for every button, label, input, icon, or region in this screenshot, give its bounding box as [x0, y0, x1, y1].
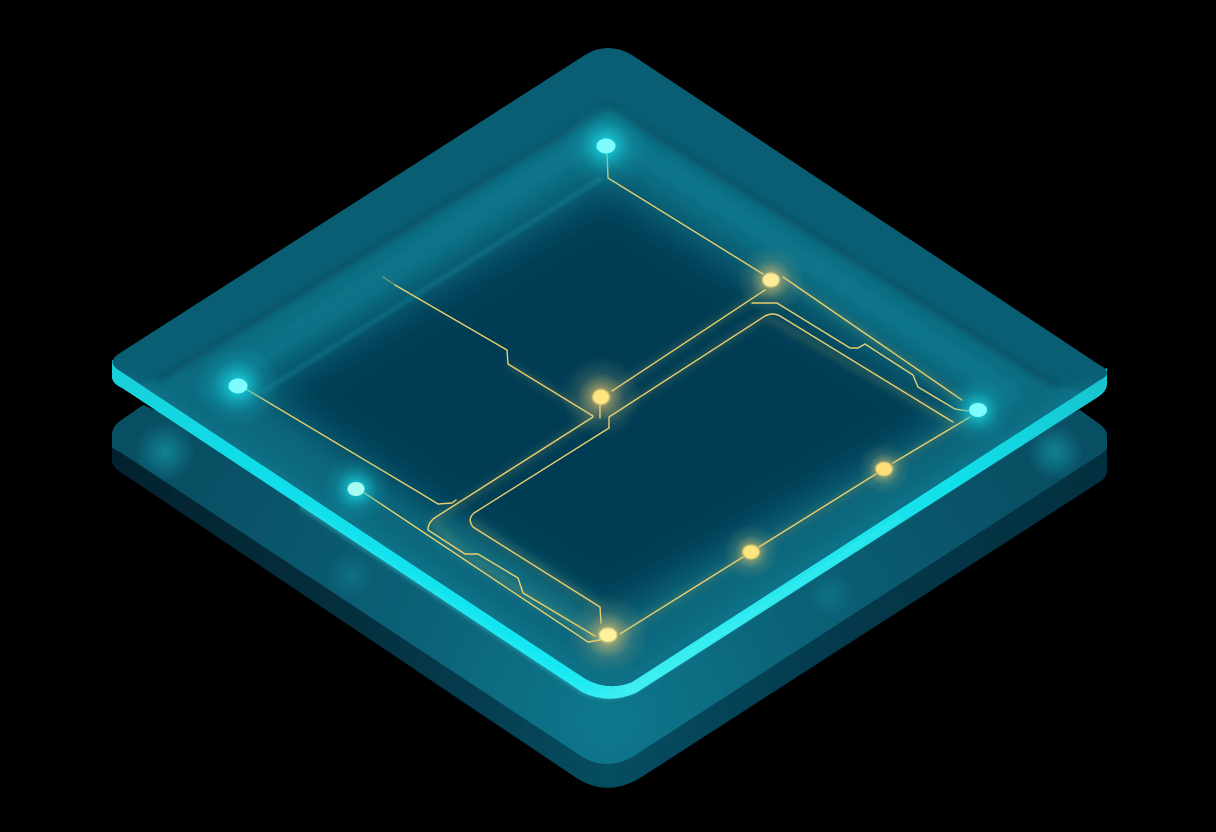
- node: lower right two: [723, 524, 779, 580]
- trace: inner frame upper right: [609, 314, 953, 428]
- soft trace glow: lower left: [440, 525, 590, 620]
- lower plate: [112, 405, 1107, 788]
- node: centre: [561, 357, 641, 437]
- plate face: [112, 48, 1107, 686]
- trace: faded start: [383, 277, 395, 285]
- faint ridge: [262, 178, 602, 392]
- trace: upper right node to right node: [783, 277, 962, 400]
- node: mid left: [322, 455, 390, 523]
- yellow nodes: [561, 246, 910, 675]
- inner panel: [262, 186, 960, 618]
- lower plate face: [112, 405, 1107, 764]
- node: upper right: [737, 246, 805, 314]
- trace: mid left node to bottom: [363, 492, 600, 642]
- trace: centre stem: [599, 403, 601, 418]
- glowing rim: [112, 360, 1107, 699]
- trace: inner bus: [470, 428, 609, 623]
- frame band: [140, 112, 1083, 686]
- lower plate glows: [135, 422, 1083, 619]
- upper plate: [90, 48, 1130, 720]
- trace: left node to bus: [246, 389, 456, 504]
- node: bottom: [568, 595, 648, 675]
- node: top: [564, 104, 648, 188]
- circuit traces: [246, 150, 970, 642]
- node: left: [196, 344, 280, 428]
- trace: upper left to centre: [395, 285, 593, 416]
- node: lower right one: [858, 443, 910, 495]
- trace: top node to upper right node: [607, 150, 763, 274]
- trace: centre to upper right node: [612, 290, 765, 391]
- trace: outer bus: [428, 417, 595, 636]
- frame glow: [205, 132, 1020, 400]
- rim inner glow: [118, 378, 1100, 686]
- lower plate edge: [112, 440, 1107, 788]
- frame groove: [158, 106, 1056, 386]
- rim highlight: [300, 506, 900, 697]
- trace: stepped line to right node: [752, 303, 968, 411]
- trace: right node through yellow nodes to bottom node: [620, 417, 970, 634]
- cyan nodes: [196, 104, 1012, 523]
- trace glow: [432, 277, 970, 636]
- node: right: [944, 376, 1012, 444]
